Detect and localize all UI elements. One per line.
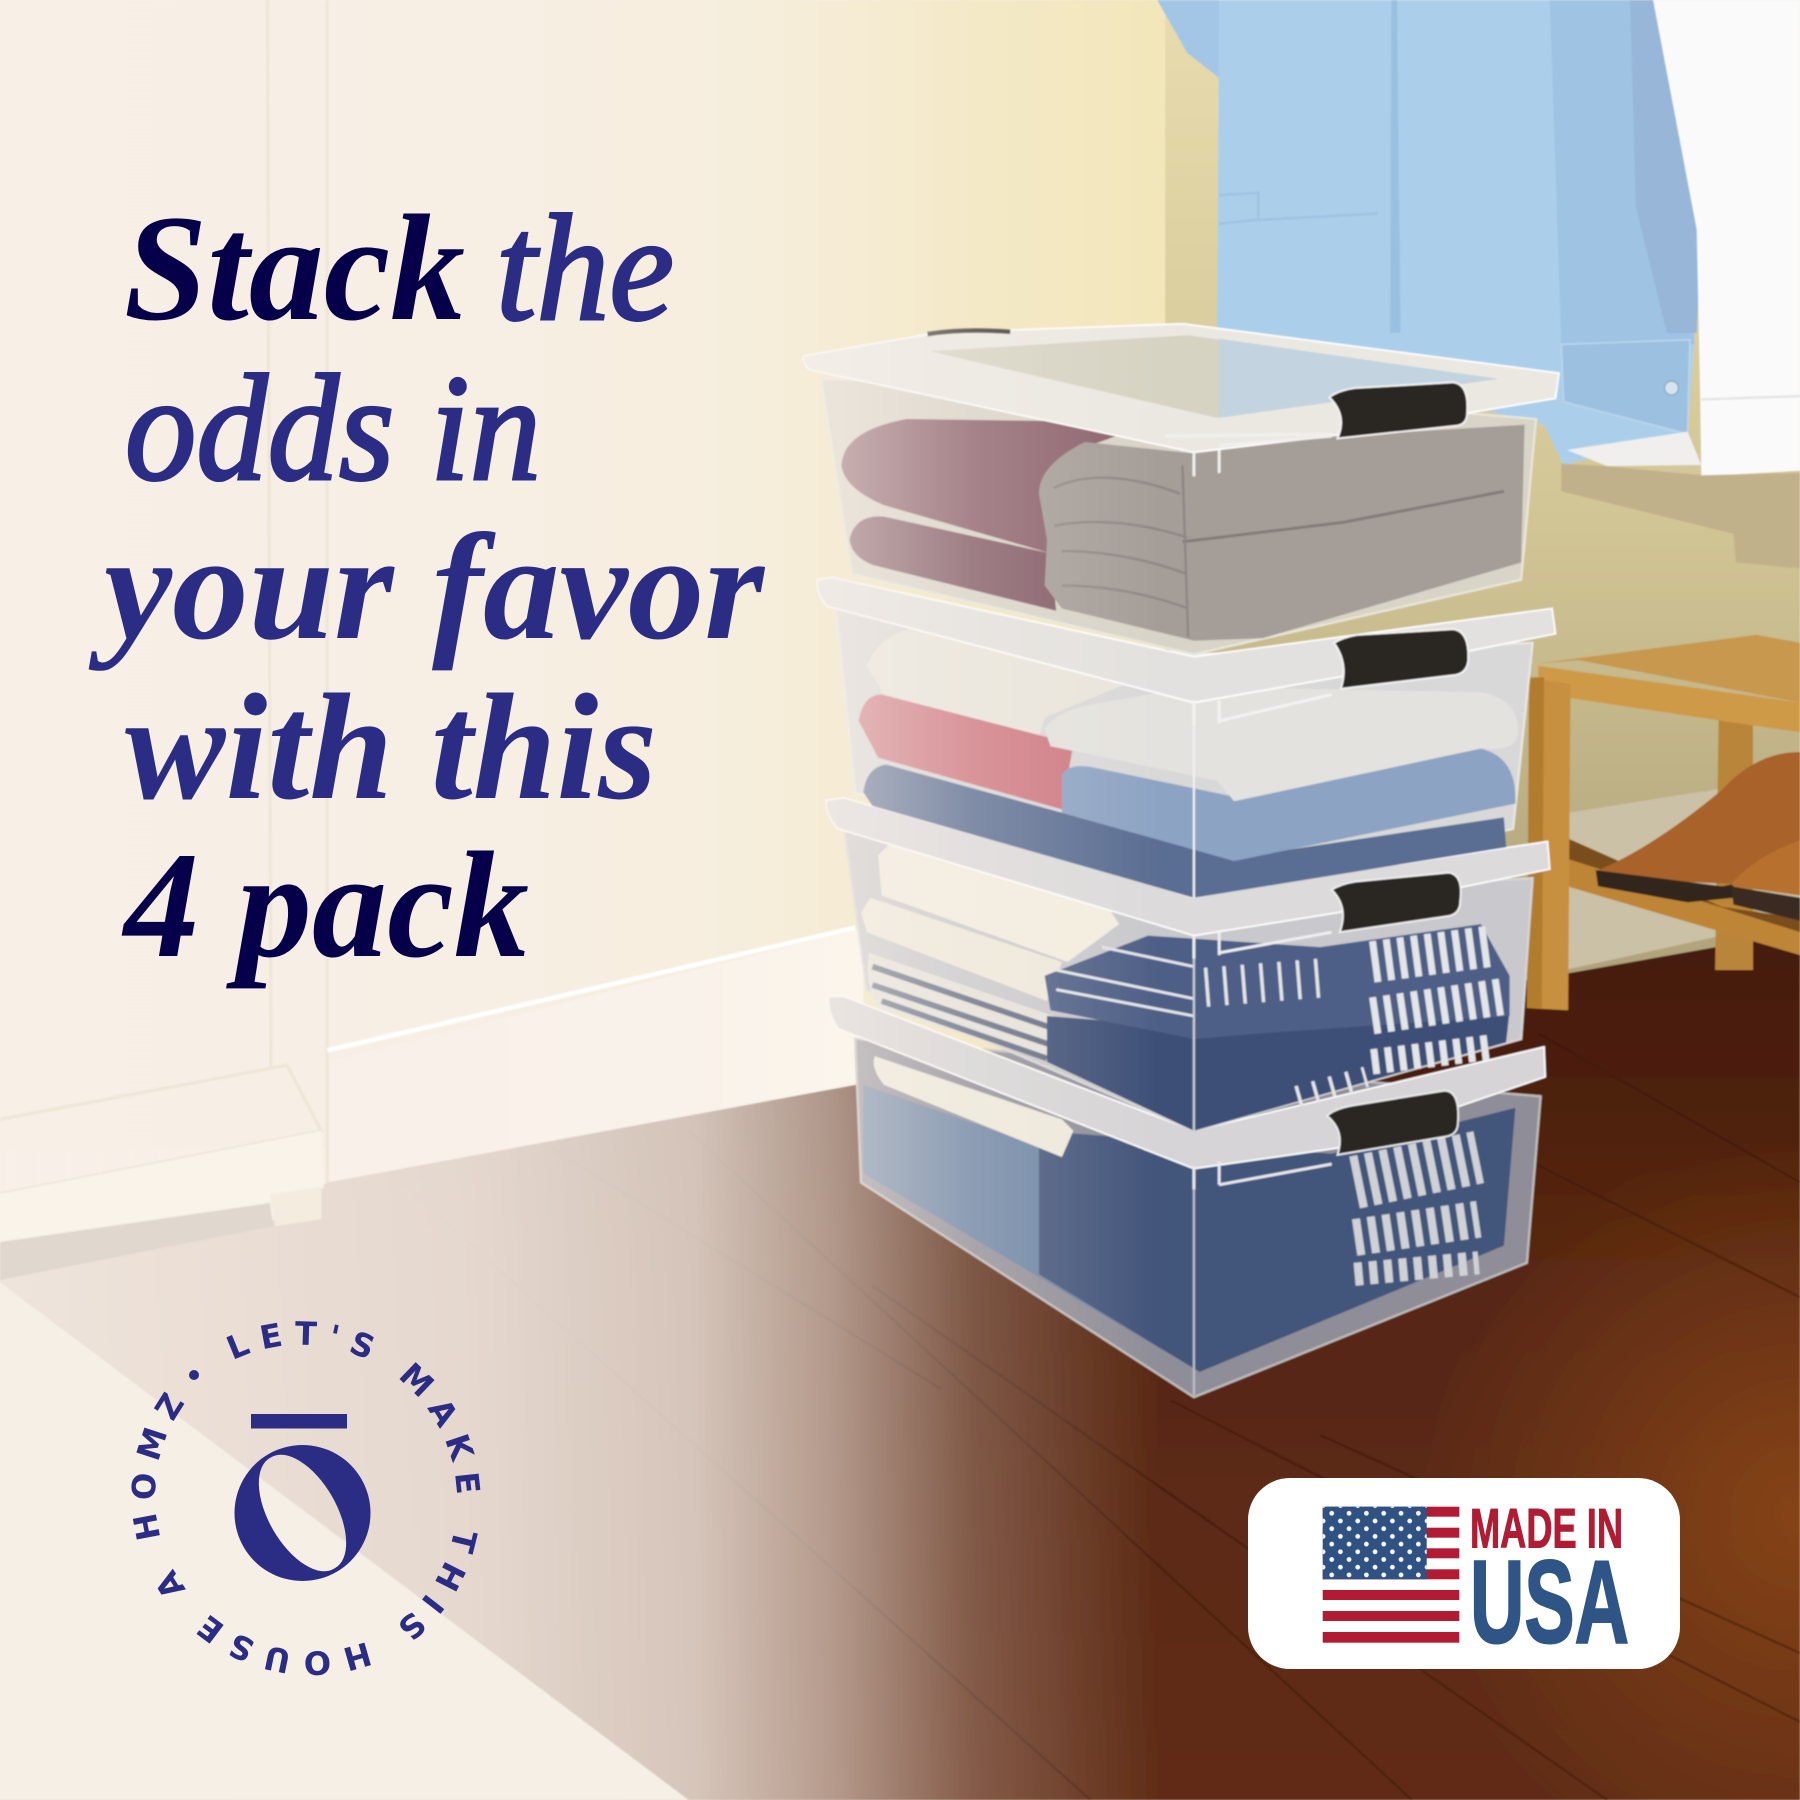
box 2 lid <box>817 577 1556 703</box>
door bottom <box>0 1131 324 1242</box>
box 2 latch <box>1334 629 1468 689</box>
storage box 1 (top) <box>803 324 1559 654</box>
blue folded cloth <box>1062 748 1515 861</box>
storage box 3 <box>826 798 1550 1131</box>
white back cloth <box>867 629 1137 737</box>
door foot <box>270 1187 321 1226</box>
storage box 2 <box>817 577 1556 898</box>
logo letter o <box>235 1445 371 1581</box>
faint door and panel lines on the left wall <box>0 0 855 1194</box>
blue shirt <box>1157 0 1701 465</box>
headline: with this <box>125 663 657 831</box>
box 4 latch <box>1327 1091 1458 1155</box>
circular brand badge <box>131 1321 480 1676</box>
headline: 4 pack <box>121 821 529 989</box>
box 4 lid <box>828 996 1545 1169</box>
striped folded cloth left <box>867 953 1054 1062</box>
logo bar <box>251 1414 347 1428</box>
wooden floor <box>0 932 1800 1800</box>
headline: odds in <box>125 344 541 512</box>
white folded cloth <box>1045 687 1518 801</box>
storage box 4 (bottom) <box>828 996 1545 1397</box>
lid inner panel <box>930 335 1498 418</box>
ring dot <box>189 1370 199 1380</box>
badge plate <box>1248 1478 1680 1669</box>
stripes <box>1056 946 1504 1096</box>
box 1 lid <box>803 324 1559 452</box>
left wall <box>0 0 1171 1148</box>
white shirt <box>1567 0 1800 476</box>
white towel <box>874 1056 1073 1157</box>
mauve blanket <box>841 419 1154 553</box>
box 3 lid <box>826 798 1550 936</box>
skirting board behind rack <box>1538 776 1800 976</box>
box 1 latch <box>1329 382 1467 439</box>
right wall <box>1165 0 1800 1033</box>
left fade overlay <box>0 0 1159 1800</box>
white folded cloth <box>878 844 1119 962</box>
headline: Stack <box>124 184 465 352</box>
skirting board left <box>327 928 863 1188</box>
headline <box>88 184 766 989</box>
US flag <box>1323 1507 1459 1643</box>
made in text: MADE IN <box>1470 1496 1623 1560</box>
dark blue folded cloth left <box>863 765 1506 898</box>
brown shoes <box>1596 752 1800 921</box>
ring text: LET'S MAKE THIS HOUSE A HOMZ <box>131 1321 480 1676</box>
pink folded cloth <box>859 695 1073 809</box>
striped cloth <box>1355 1157 1479 1274</box>
white rug <box>0 1282 689 1800</box>
headline: your favor <box>88 503 766 671</box>
navy folded cloth <box>1047 1010 1510 1131</box>
khaki trousers <box>1561 464 1800 568</box>
box 3 latch <box>1332 872 1461 932</box>
headline: the <box>496 184 674 352</box>
Made in USA badge <box>1248 1478 1680 1669</box>
grey blanket <box>1039 425 1525 641</box>
floor shadow band <box>0 1203 273 1280</box>
shoe rack <box>1527 635 1800 1010</box>
USA text: USA <box>1470 1537 1629 1669</box>
